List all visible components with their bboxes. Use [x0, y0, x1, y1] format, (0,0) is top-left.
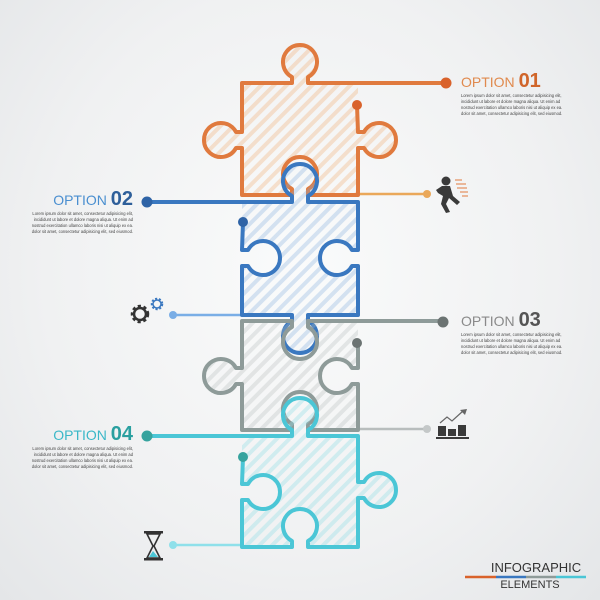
option 01 text — [461, 70, 562, 116]
option 03 text: incididunt ut labore et dolore magna aliqua. Ut enim ad — [461, 338, 560, 343]
title: infographic elements: ELEMENTS — [500, 579, 560, 591]
option 01 text: OPTION 01 — [461, 70, 541, 92]
option 03 text: nostrud exercitation ullamco laboris nisi ut aliquip ex ea. — [461, 344, 562, 349]
icon: gears — [132, 299, 162, 322]
option 03 text: Lorem ipsum dolor sit amet, consectetur adipisicing elit, — [461, 332, 562, 337]
option 01 text: Lorem ipsum dolor sit amet, consectetur adipisicing elit, — [461, 93, 562, 98]
option 03 text: dolor sit amet, consectetur adipisicing elit, sed eiusmod. — [461, 350, 562, 355]
piece: gray — [204, 316, 448, 430]
piece: blue — [142, 164, 358, 353]
option 04 text: nostrud exercitation ullamco laboris nisi ut aliquip ex ea. — [32, 458, 133, 463]
icon: runner — [436, 176, 468, 213]
option 01 text: nostrud exercitation ullamco laboris nisi ut aliquip ex ea. — [461, 105, 562, 110]
icon: chart — [436, 409, 469, 439]
option 04 text: Lorem ipsum dolor sit amet, consectetur adipisicing elit, — [32, 446, 133, 451]
option 02 text: OPTION 02 — [53, 188, 133, 210]
option 04 text: dolor sit amet, consectetur adipisicing elit, sed eiusmod. — [32, 464, 133, 469]
icon: hourglass — [144, 531, 163, 560]
option 02 text: incididunt ut labore et dolore magna aliqua. Ut enim ad — [34, 217, 133, 222]
option 01 text: dolor sit amet, consectetur adipisicing elit, sed eiusmod. — [461, 111, 562, 116]
option 02 text: Lorem ipsum dolor sit amet, consectetur adipisicing elit, — [32, 211, 133, 216]
title: infographic elements: INFOGRAPHIC — [491, 560, 581, 575]
piece: orange — [204, 45, 452, 195]
option 02 text: dolor sit amet, consectetur adipisicing elit, sed eiusmod. — [32, 229, 133, 234]
option 02 text: nostrud exercitation ullamco laboris nisi ut aliquip ex ea. — [32, 223, 133, 228]
piece: cyan — [142, 398, 396, 547]
option 03 text — [461, 309, 562, 355]
option 01 text: incididunt ut labore et dolore magna aliqua. Ut enim ad — [461, 99, 560, 104]
option 04 text: incididunt ut labore et dolore magna aliqua. Ut enim ad — [34, 452, 133, 457]
option 04 text: OPTION 04 — [53, 423, 133, 445]
option 04 text — [32, 423, 133, 469]
title: infographic elements — [491, 560, 581, 591]
option 03 text: OPTION 03 — [461, 309, 541, 331]
title underline — [465, 576, 586, 578]
option 02 text — [32, 188, 133, 234]
connector lines — [169, 190, 431, 549]
